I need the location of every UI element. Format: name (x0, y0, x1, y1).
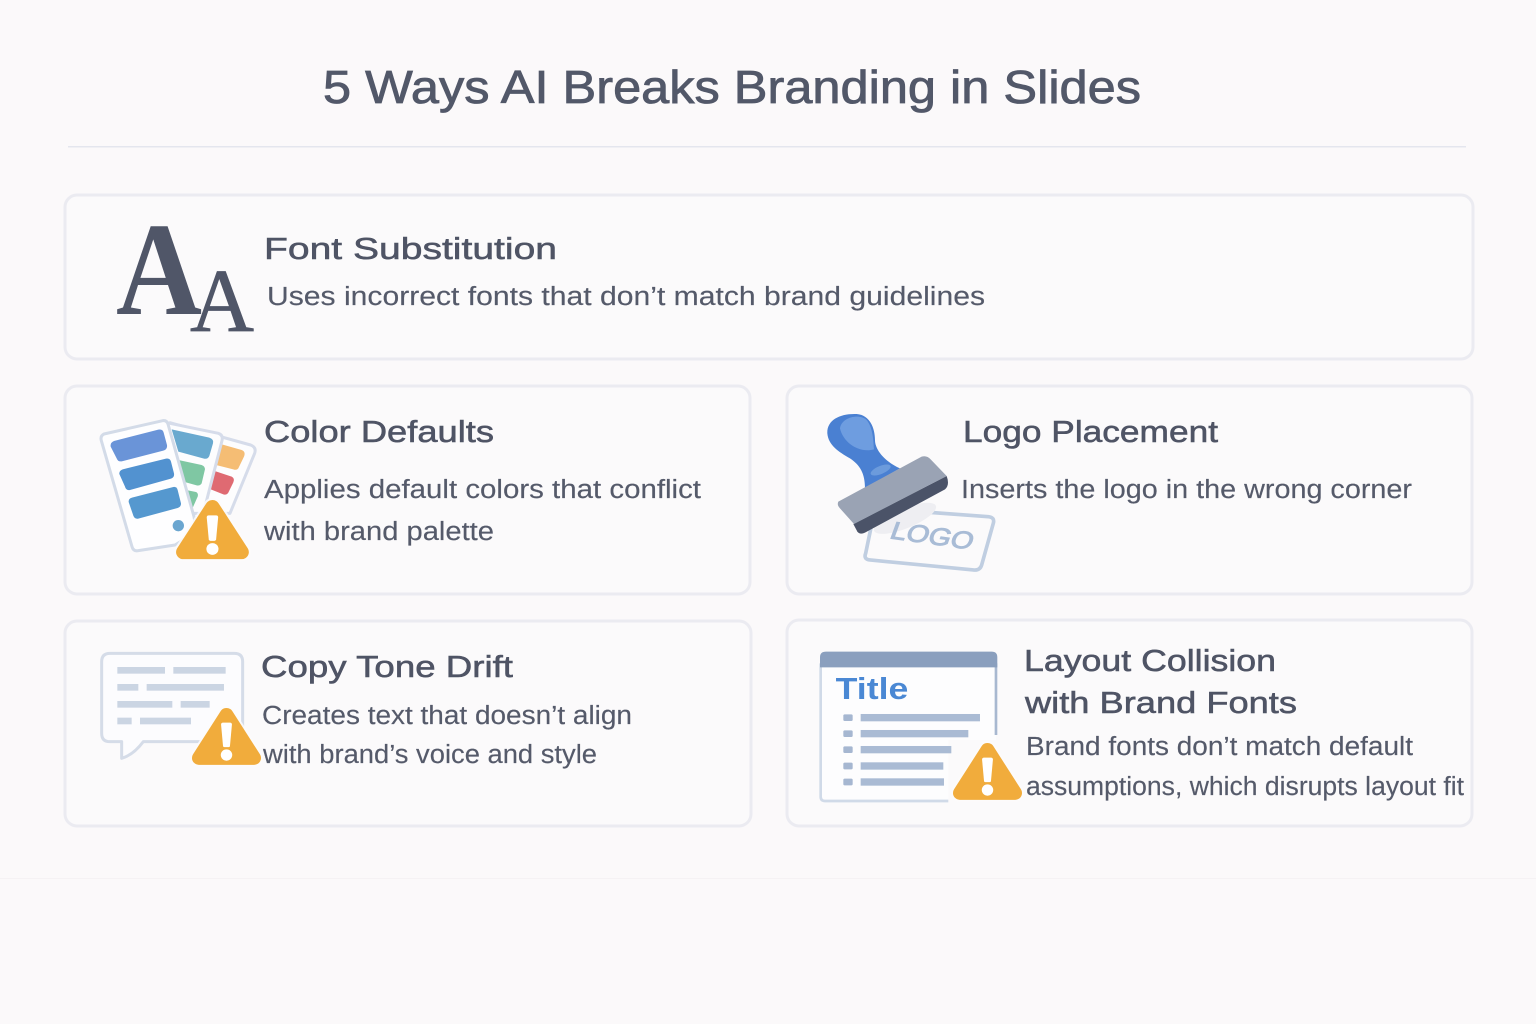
icon: letter A pair (116, 195, 254, 351)
heading: Logo Placement (963, 414, 1218, 449)
heading (1024, 643, 1297, 720)
icon: warning triangle (183, 507, 242, 555)
description: with brand’s voice and style (262, 741, 597, 769)
panel: layout collision (787, 620, 1472, 826)
description: Inserts the logo in the wrong corner (961, 476, 1413, 504)
description (262, 702, 632, 769)
heading: Color Defaults (264, 414, 494, 449)
icon: logo stamp (827, 414, 994, 570)
icon: speech bubble with warning (102, 653, 254, 761)
icon: letter A pair: A (190, 252, 254, 351)
icon: slide layout with warning (820, 652, 1015, 801)
description: Applies default colors that conflict (264, 476, 701, 504)
description: Brand fonts don’t match default (1026, 733, 1413, 761)
description (1026, 733, 1464, 801)
heading: Copy Tone Drift (261, 649, 513, 684)
description: Uses incorrect fonts that don’t match brand guidelines (267, 283, 985, 311)
icon: logo stamp: LOGO (887, 517, 978, 555)
description: assumptions, which disrupts layout fit (1026, 773, 1464, 801)
heading: Layout Collision (1024, 643, 1276, 678)
icon: letter A pair: A (116, 195, 202, 343)
panel: color defaults (65, 386, 750, 594)
icon: color swatches with warning (101, 421, 255, 555)
heading: with Brand Fonts (1024, 685, 1297, 720)
panel: copy tone drift (65, 621, 751, 826)
heading: Font Substitution (264, 231, 557, 266)
icon: warning triangle (199, 715, 254, 761)
icon: warning triangle (960, 750, 1015, 796)
description: Creates text that doesn’t align (262, 702, 632, 730)
description: with brand palette (263, 518, 494, 546)
panel: font substitution (65, 195, 1473, 359)
panel: logo placement (787, 386, 1472, 594)
title: 5 Ways AI Breaks Branding in Slides (323, 61, 1141, 113)
icon: slide layout with warning: Title (836, 673, 908, 706)
description (263, 476, 701, 546)
